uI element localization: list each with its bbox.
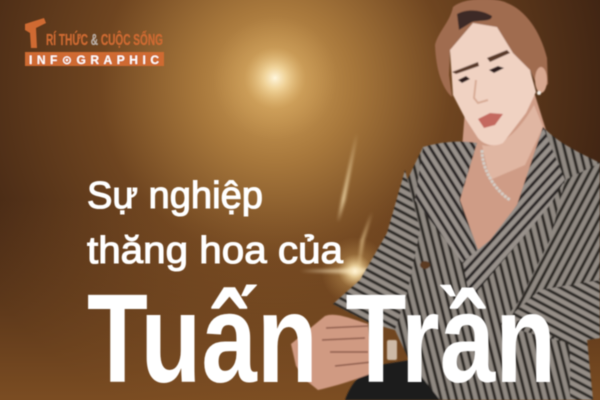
right forearm [500,280,600,400]
jacket button [420,261,430,269]
clasped hands [291,315,375,390]
logo banner [25,52,164,66]
wristwatch [387,340,397,360]
right sleeve [500,163,600,345]
heading: career line 1: Sự nghiệp [87,175,263,217]
hair shadow [457,10,492,30]
logo mark [25,18,46,48]
lips [478,113,503,128]
eyebrows [452,50,510,74]
face [450,23,536,145]
logo banner text: INF⊙GRAPHIC [29,53,159,67]
neck shadow [482,105,543,180]
ear [535,67,547,93]
logo: Tri thuc & Cuoc song infographic [25,18,164,67]
left sleeve [333,170,420,330]
hair [435,0,548,97]
earring [537,91,541,95]
light flares [213,16,410,305]
left lapel [415,142,478,262]
heading: career line 2: thăng hoa của [87,230,344,272]
necklace [482,150,510,200]
neck and chest [458,95,546,256]
logo wordmark: RÍ THỨC & CUỘC SỐNG [46,29,163,49]
jacket body [333,127,600,400]
trousers [345,360,445,400]
portrait of man in striped jacket [291,0,600,400]
eyes [458,66,504,83]
right lapel [463,127,565,300]
nose shadow [474,80,488,103]
